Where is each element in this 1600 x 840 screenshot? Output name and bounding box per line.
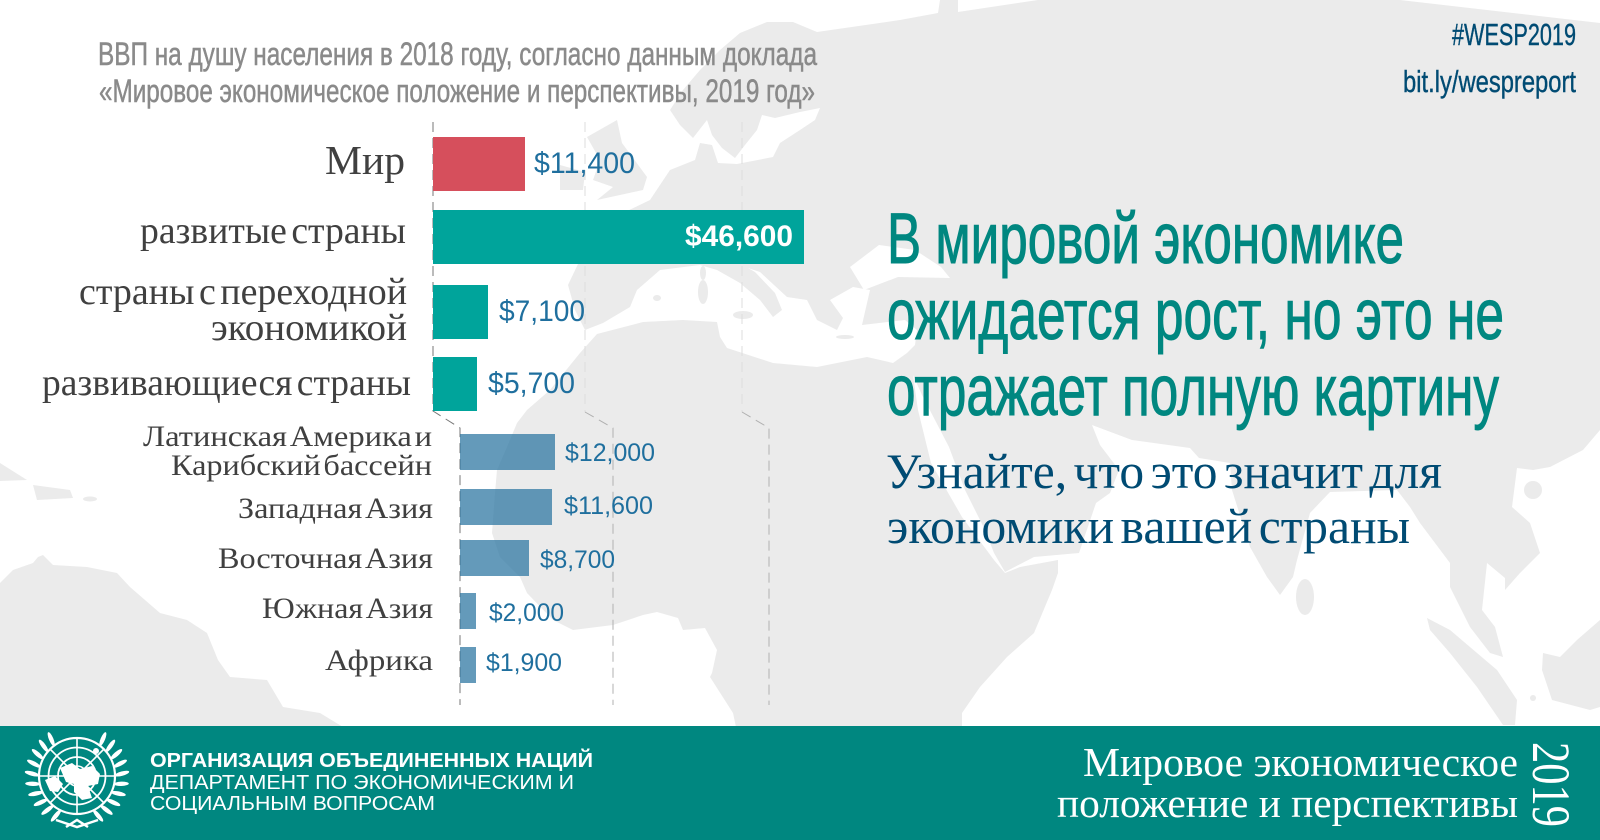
footer band — [0, 726, 1600, 840]
bar: world — [433, 137, 525, 191]
category labels: страны с переходной — [79, 271, 407, 313]
bar: developing countries — [433, 357, 477, 411]
bar chart: GDP per capita — [42, 122, 804, 705]
value labels: $5,700 — [488, 367, 575, 400]
subtitle: chart title — [98, 36, 817, 109]
value labels: $8,700 — [540, 546, 615, 574]
category labels: Западная Азия — [238, 492, 433, 525]
call to action text: экономики вашей страны — [887, 498, 1410, 554]
footer: organisation name: ОРГАНИЗАЦИЯ ОБЪЕДИНЕННЫХ НАЦИЙ — [150, 748, 593, 772]
footer: report title — [1057, 739, 1518, 826]
value labels: $46,600 — [685, 220, 793, 253]
footer: report title: положение и перспективы — [1057, 780, 1518, 826]
hashtag and report link — [1403, 17, 1576, 99]
subtitle: chart title: ВВП на душу населения в 2018 году, согласно данным доклада — [98, 36, 817, 72]
call to action text: Узнайте, что это значит для — [886, 443, 1442, 499]
value labels — [486, 147, 793, 677]
category labels: развитые страны — [140, 210, 406, 252]
main heading: В мировой экономике — [887, 200, 1404, 279]
category labels — [42, 137, 433, 677]
value labels: $11,400 — [534, 147, 635, 180]
category labels: Южная Азия — [262, 592, 433, 625]
main heading — [887, 200, 1504, 431]
footer: organisation name — [150, 748, 593, 815]
call to action text — [886, 443, 1442, 554]
category labels: Африка — [325, 644, 433, 677]
category labels: Восточная Азия — [218, 542, 433, 575]
category labels: Карибский бассейн — [171, 449, 432, 482]
value labels: $7,100 — [499, 295, 585, 328]
category labels: Мир — [325, 137, 405, 183]
footer: report title: Мировое экономическое — [1083, 739, 1518, 785]
category labels: развивающиеся страны — [42, 362, 411, 404]
footer: organisation name: ДЕПАРТАМЕНТ ПО ЭКОНОМИЧЕСКИМ И — [150, 772, 574, 794]
value labels: $1,900 — [486, 649, 562, 677]
category labels: экономикой — [211, 307, 407, 349]
value labels: $12,000 — [565, 439, 655, 467]
icon: UN emblem — [24, 731, 130, 827]
bar: developed countries — [433, 210, 804, 264]
bar: transition economies — [433, 285, 488, 339]
category labels: Латинская Америка и — [143, 420, 432, 453]
value labels: $11,600 — [564, 492, 653, 520]
subtitle: chart title: «Мировое экономическое положение и перспективы, 2019 год» — [99, 73, 815, 109]
footer: organisation name: СОЦИАЛЬНЫМ ВОПРОСАМ — [150, 793, 435, 815]
value labels: $2,000 — [489, 599, 564, 627]
bars: developing regions — [460, 434, 555, 683]
